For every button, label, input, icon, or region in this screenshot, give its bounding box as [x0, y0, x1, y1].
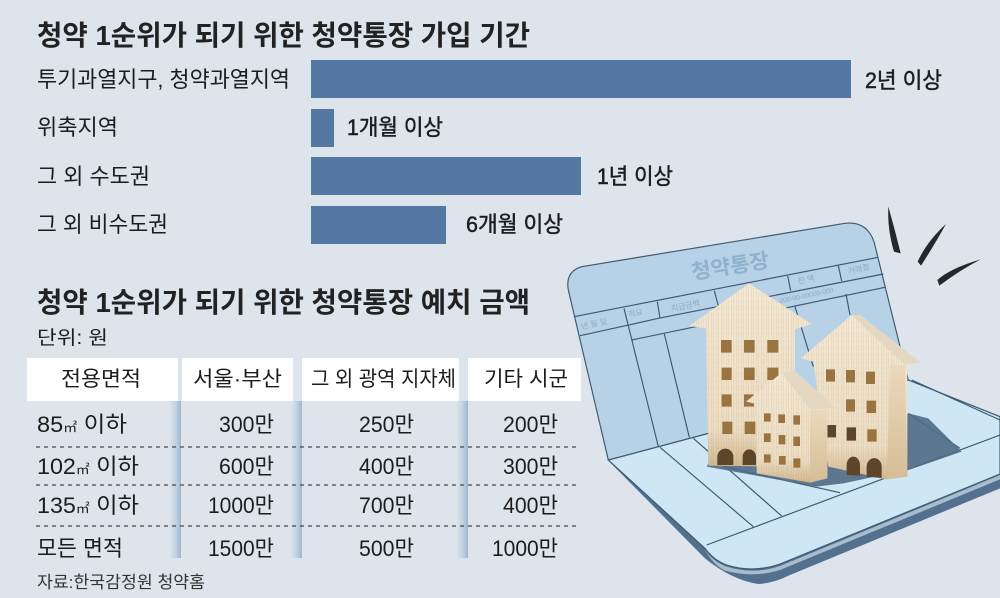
bankbook column labels: 거래점	[847, 262, 870, 276]
header row: 기타 시군	[484, 368, 568, 391]
row: 85	[37, 412, 558, 437]
bar row: other non-capital area: 그 외 비수도권	[37, 212, 168, 237]
header row: 그 외 광역 지자체	[311, 368, 456, 391]
unit note: 단위: 원	[37, 327, 108, 349]
row: all: 모든 면적	[37, 536, 123, 561]
bankbook column labels: 지급금액	[670, 298, 701, 314]
bar row: speculation zones: 2년 이상	[865, 68, 942, 93]
row: 85: 250만	[359, 412, 414, 437]
row: 102: 600만	[219, 454, 274, 479]
header row: 전용면적	[61, 368, 141, 391]
bankbook upper page	[568, 223, 908, 460]
bankbook lower page	[608, 380, 1000, 569]
cast shadow	[707, 413, 962, 487]
tall wooden house	[689, 283, 812, 467]
bar row: other capital area	[37, 157, 673, 195]
bankbook column labels: 000-00-00000-000	[779, 287, 834, 305]
header row: 서울·부산	[193, 368, 282, 391]
column shadows	[170, 401, 468, 558]
title: deposit amount: 청약 1순위가 되기 위한 청약통장 예치 금액	[37, 287, 530, 318]
bankbook upper page ruled lines	[574, 257, 1000, 545]
row: all: 1500만	[208, 536, 274, 561]
bar row: speculation zones	[37, 60, 942, 98]
bar row: other non-capital area: 6개월 이상	[466, 212, 563, 237]
bankbook column labels	[580, 262, 870, 331]
row: 85: 85㎡ 이하	[37, 412, 127, 437]
row: 85: 200만	[503, 412, 558, 437]
row: all: 500만	[359, 536, 414, 561]
row: 135: 135㎡ 이하	[37, 493, 139, 518]
bar row: other capital area: 1년 이상	[597, 164, 673, 189]
row: 135: 400만	[503, 493, 558, 518]
bar row: declining zones: 1개월 이상	[347, 115, 443, 140]
table: deposit amounts	[27, 358, 581, 561]
row: 135	[37, 493, 558, 518]
bar row: declining zones	[37, 109, 443, 147]
bar row: declining zones: 위축지역	[37, 115, 118, 140]
row: 85: 300만	[219, 412, 274, 437]
row: 135: 1000만	[208, 493, 274, 518]
bankbook column labels: 잔 액	[797, 273, 815, 286]
bar row: speculation zones: 투기과열지구, 청약과열지역	[37, 67, 290, 92]
dashed row dividers	[36, 447, 580, 526]
bankbook column labels: 년 월 일	[580, 316, 608, 331]
row: 135: 700만	[359, 493, 414, 518]
header row	[27, 358, 581, 401]
bankbook cover	[608, 461, 1000, 584]
row: all	[37, 536, 558, 561]
bar row: other non-capital area	[37, 206, 563, 244]
row: 102: 300만	[503, 454, 558, 479]
source: 자료:한국감정원 청약홈	[37, 573, 205, 592]
row: 102: 400만	[359, 454, 414, 479]
title: subscription period: 청약 1순위가 되기 위한 청약통장 가입 기간	[37, 20, 530, 51]
illustration: bankbook with wooden houses	[568, 207, 1000, 584]
bankbook column labels: 적요	[627, 306, 644, 319]
bar chart: subscription period	[37, 60, 942, 244]
row: 102	[37, 454, 558, 479]
bar row: other capital area: 그 외 수도권	[37, 164, 150, 189]
small wooden house	[746, 370, 837, 483]
bankbook page edge	[705, 475, 1000, 574]
row: all: 1000만	[492, 536, 558, 561]
right wooden house	[801, 315, 921, 479]
emphasis strokes	[888, 207, 981, 286]
row: 102: 102㎡ 이하	[37, 454, 139, 479]
bankbook title: 청약통장	[690, 249, 771, 284]
